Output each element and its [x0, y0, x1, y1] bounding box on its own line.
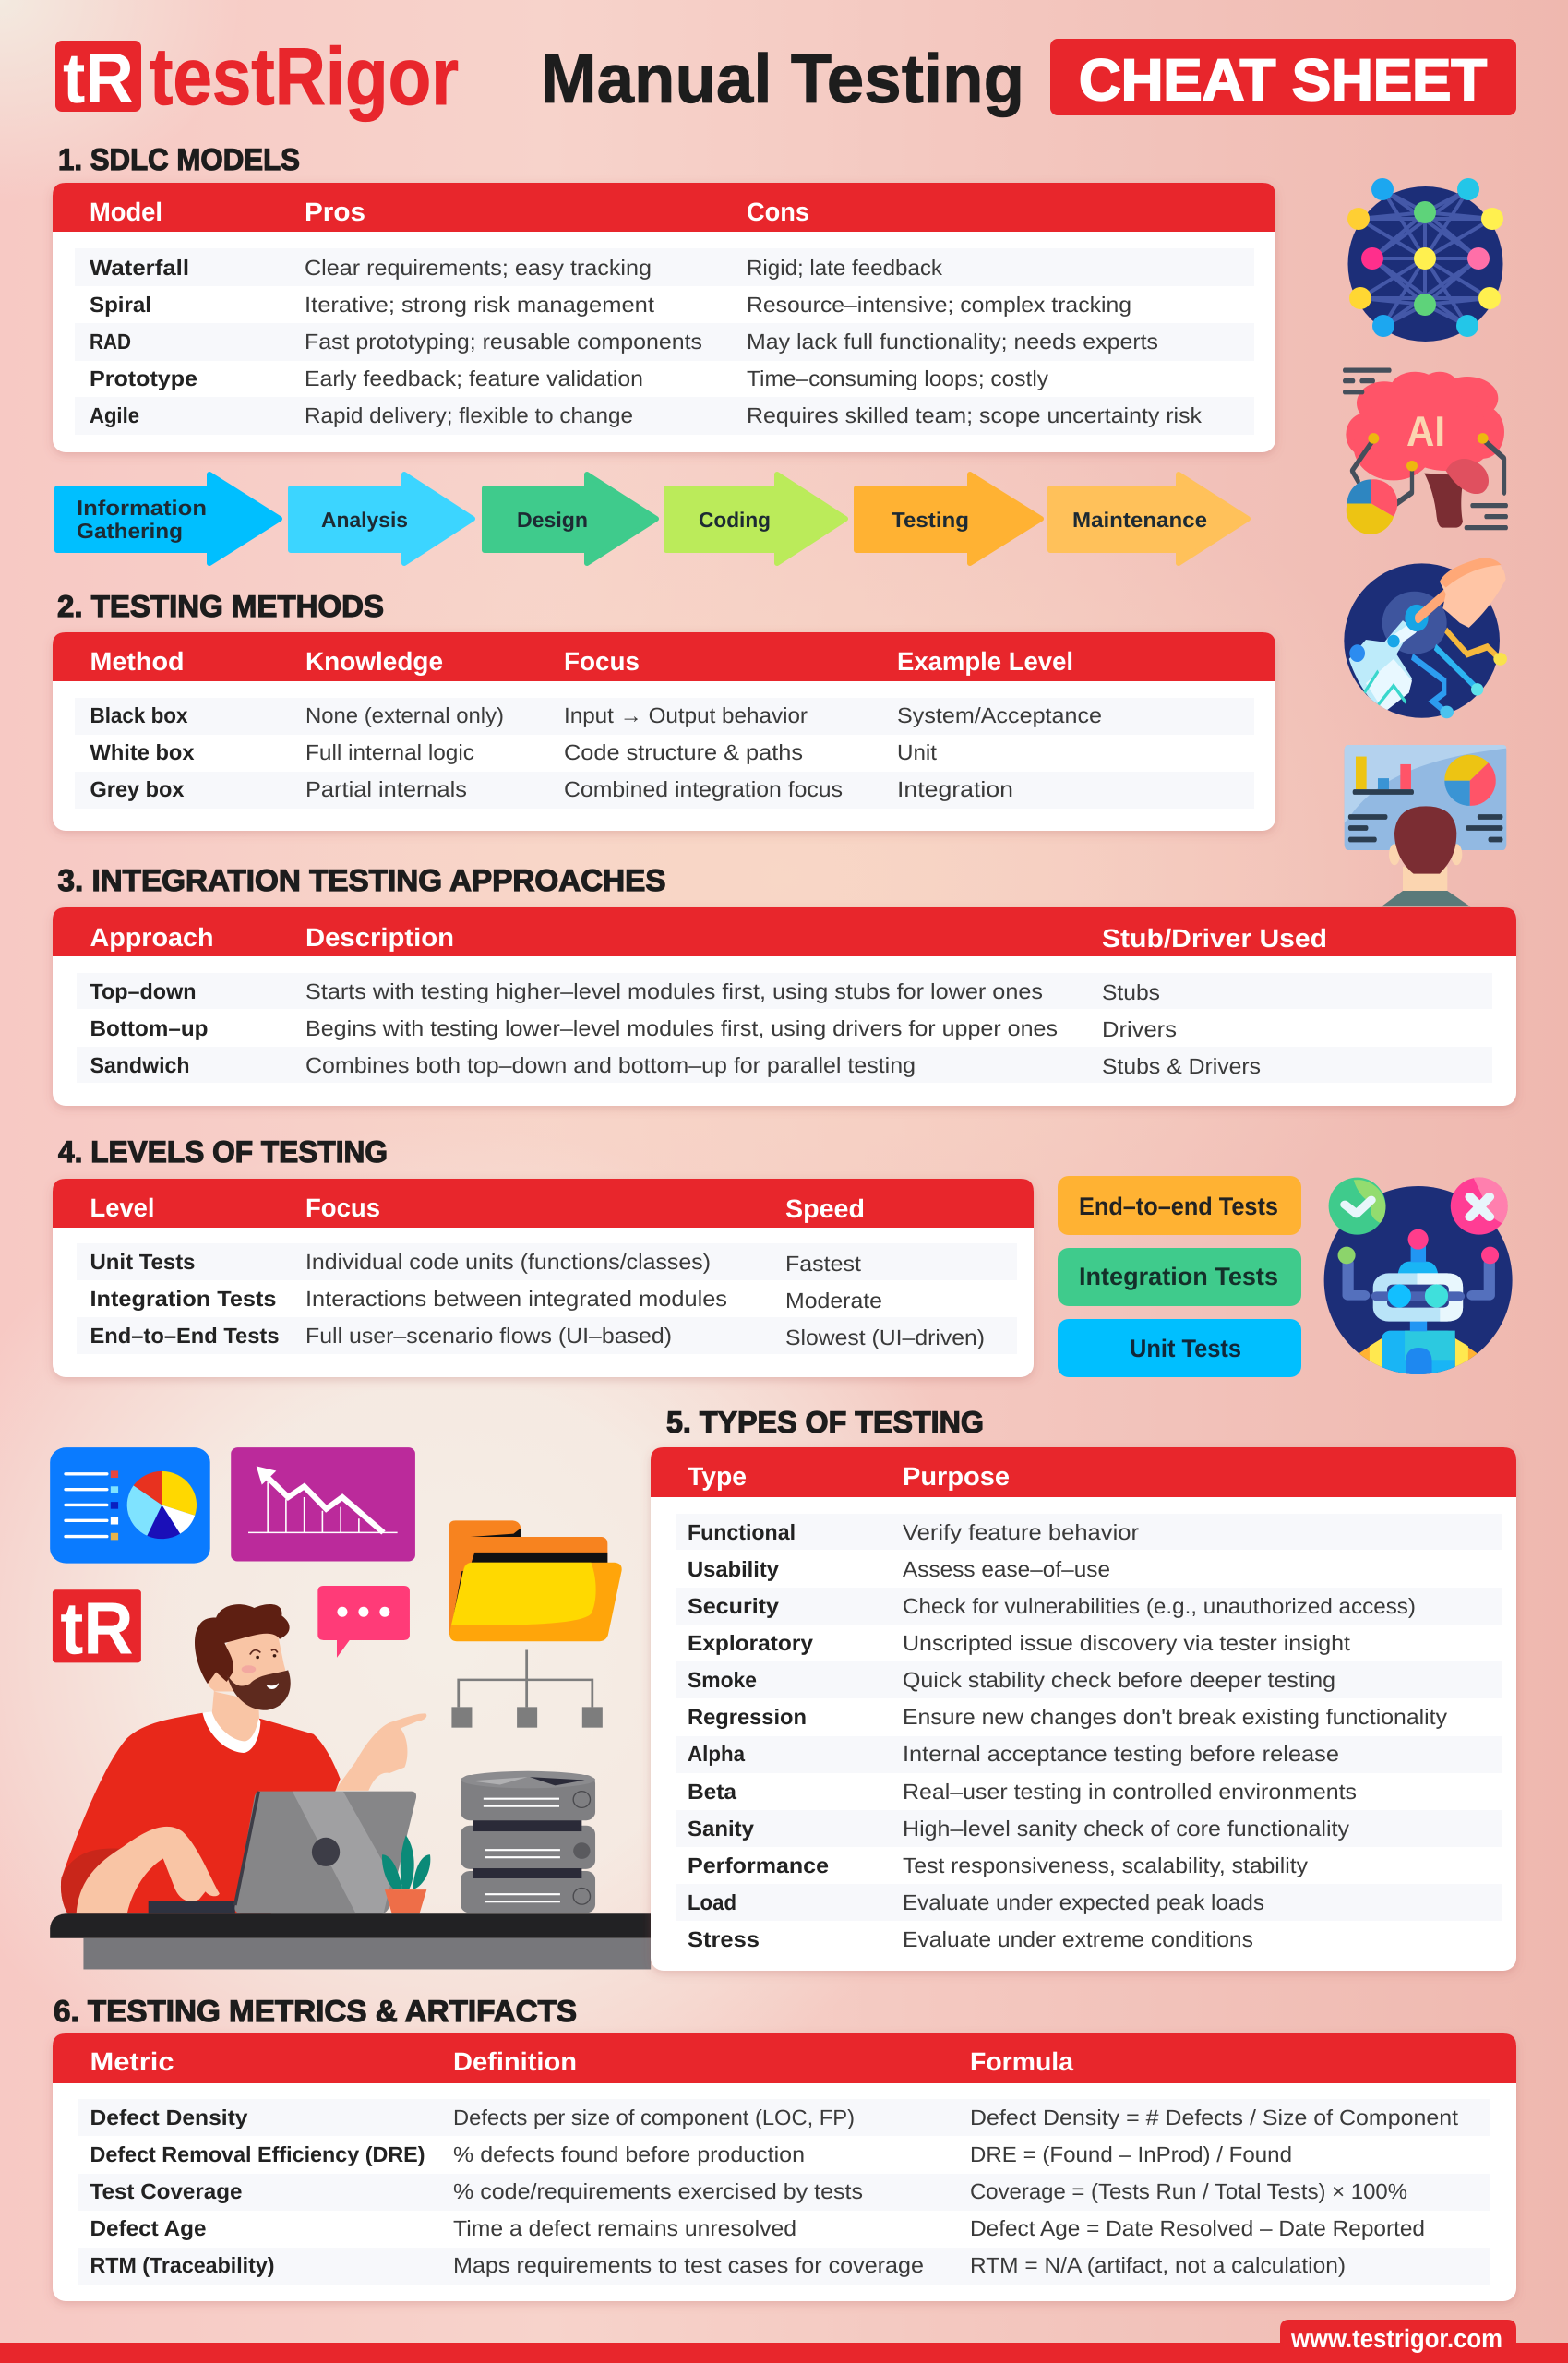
row: Top-down: Top–down — [90, 979, 196, 1003]
panel: testing methods table — [53, 632, 1275, 831]
logo: testRigor: tR — [63, 39, 134, 118]
row: Grey box: Integration — [897, 777, 1013, 801]
row: Grey box: Partial internals — [305, 777, 467, 801]
row: Defect Density: Defects per size of component (LOC, FP) — [453, 2105, 855, 2129]
laptop — [149, 1792, 416, 1913]
header row: Speed — [785, 1194, 865, 1223]
row: White box: White box — [90, 740, 194, 764]
panel: types of testing table — [651, 1447, 1516, 1971]
row: Beta: Beta — [688, 1780, 737, 1804]
row: Black box: System/Acceptance — [897, 703, 1102, 727]
heading: 3. Integration Testing Approaches: 3. INTEGRATION TESTING APPROACHES — [57, 863, 666, 897]
header row — [53, 183, 1275, 232]
heading: 1. SDLC Models: 1. SDLC MODELS — [58, 142, 300, 176]
row: Waterfall — [75, 248, 1254, 286]
header row: Approach — [90, 923, 214, 952]
row: RAD — [75, 323, 1254, 361]
row: Defect Age: Defect Age = Date Resolved – Date Reported — [970, 2216, 1425, 2240]
logo: testRigor — [55, 30, 459, 122]
row: Prototype: Early feedback; feature validation — [305, 366, 643, 390]
row: Beta — [688, 1780, 1357, 1804]
row: Sanity — [676, 1810, 1502, 1847]
header row: Method — [90, 647, 185, 676]
icon: folder — [449, 1520, 622, 1641]
row: White box: Code structure & paths — [564, 740, 803, 764]
test pyramid pills — [1058, 1176, 1301, 1377]
row: Exploratory: Unscripted issue discovery via tester insight — [903, 1631, 1350, 1655]
row: Smoke: Quick stability check before deeper testing — [903, 1668, 1335, 1692]
row: Integration Tests: Interactions between integrated modules — [305, 1287, 727, 1311]
arrow: Coding — [666, 474, 845, 563]
row: Test Coverage — [78, 2174, 1490, 2211]
illustration: tester at laptop with data icons — [50, 1447, 651, 1969]
header row — [53, 632, 1275, 681]
icon: neural network — [1347, 178, 1503, 342]
row: Test Coverage: Coverage = (Tests Run / Total Tests) × 100% — [970, 2179, 1407, 2203]
heading: 4. Levels of Testing: 4. LEVELS OF TESTING — [58, 1134, 388, 1169]
row: Unit Tests: Individual code units (functions/classes) — [305, 1250, 711, 1274]
row: Defect Age: Time a defect remains unresolved — [453, 2216, 796, 2240]
row: Regression: Ensure new changes don't break existing functionality — [903, 1705, 1447, 1729]
row: DRE — [90, 2142, 1292, 2166]
footer bar with website tab — [0, 2320, 1568, 2363]
header row: Metric — [90, 2047, 174, 2076]
row: Usability: Assess ease–of–use — [903, 1557, 1110, 1581]
row: Functional — [676, 1514, 1502, 1550]
row: Security — [676, 1588, 1502, 1625]
row: DRE: Defect Removal Efficiency (DRE) — [90, 2142, 425, 2166]
icon: declining line chart — [231, 1447, 415, 1562]
logo: testRigor: testRigor — [150, 30, 459, 122]
row: Smoke — [676, 1661, 1502, 1698]
header row: Example Level — [897, 647, 1073, 676]
arrow: Maintenance: Maintenance — [1072, 508, 1207, 532]
row: Spiral — [90, 293, 1131, 317]
row: Waterfall: Rigid; late feedback — [747, 256, 942, 280]
row: Defect Density: Defect Density — [90, 2105, 247, 2129]
row: Defect Age: Defect Age — [90, 2216, 207, 2240]
row: Prototype: Time–consuming loops; costly — [747, 366, 1048, 390]
header row: Model — [90, 198, 162, 226]
footer bar with website tab: www.testrigor.com — [1290, 2324, 1502, 2353]
row: Load — [676, 1884, 1502, 1921]
row: Performance: Performance — [688, 1853, 829, 1877]
row: Sanity: Sanity — [688, 1817, 754, 1841]
row: Functional: Functional — [688, 1520, 796, 1544]
heading: 6. Testing Metrics and Artifacts: 6. TESTING METRICS & ARTIFACTS — [54, 1994, 577, 2028]
row: White box: Full internal logic — [305, 740, 474, 764]
row: Stress: Evaluate under extreme conditions — [903, 1927, 1253, 1951]
row: Alpha: Internal acceptance testing before release — [903, 1742, 1339, 1766]
arrow: Coding: Coding — [699, 508, 771, 532]
desk — [50, 1913, 651, 1969]
row: DRE: % defects found before production — [453, 2142, 805, 2166]
header row: Level — [90, 1193, 155, 1222]
row: Defect Density — [78, 2099, 1490, 2136]
row: Usability — [688, 1557, 1110, 1581]
row: Sanity: High–level sanity check of core functionality — [903, 1817, 1349, 1841]
row: Black box: Black box — [90, 703, 188, 727]
row: Exploratory — [688, 1631, 1350, 1655]
title: Manual Testing: Manual Testing — [541, 40, 1024, 117]
header row: Stub/Driver Used — [1102, 924, 1327, 953]
row: End-to-End Tests: Full user–scenario flows (UI–based) — [305, 1324, 672, 1348]
header row: Pros — [305, 198, 365, 226]
arrow: Analysis: Analysis — [321, 508, 408, 532]
row: RTM: RTM (Traceability) — [90, 2253, 275, 2277]
row: Agile — [75, 397, 1254, 435]
arrow: Testing — [856, 474, 1041, 563]
panel: metrics table — [53, 2033, 1516, 2301]
SDLC process arrows — [57, 474, 1248, 563]
row: Usability: Usability — [688, 1557, 779, 1581]
row: Regression — [688, 1705, 1447, 1729]
row: Load: Load — [688, 1890, 736, 1914]
row: Waterfall: Waterfall — [90, 256, 189, 280]
row: Prototype: Prototype — [90, 366, 197, 390]
arrow: Testing: Testing — [892, 508, 969, 532]
row: Waterfall: Clear requirements; easy tracking — [305, 256, 652, 280]
panel: levels of testing table — [53, 1179, 1034, 1377]
row: Stress: Stress — [688, 1927, 760, 1951]
icon: database server — [461, 1771, 595, 1913]
row: End-to-End Tests: End–to–End Tests — [90, 1324, 279, 1348]
icon: AI brain: AI — [1406, 407, 1445, 455]
row: Agile: Requires skilled team; scope uncertainty risk — [747, 403, 1202, 427]
figure: man pointing — [61, 1604, 426, 1913]
icon: hierarchy diagram — [451, 1649, 603, 1728]
arrow: Maintenance — [1050, 474, 1248, 563]
pill: Integration Tests — [1058, 1248, 1301, 1306]
row: Defect Density: Defect Density = # Defects / Size of Component — [970, 2105, 1458, 2129]
row: Top-down: Stubs — [1102, 980, 1160, 1004]
row: Performance: Test responsiveness, scalability, stability — [903, 1853, 1308, 1877]
row: RAD: Fast prototyping; reusable components — [305, 330, 702, 354]
row: Integration Tests: Integration Tests — [90, 1287, 277, 1311]
arrow: Design — [485, 474, 656, 563]
row: Smoke: Smoke — [688, 1668, 757, 1692]
row: Performance — [688, 1853, 1308, 1877]
header row — [53, 907, 1516, 956]
row: Alpha — [676, 1736, 1502, 1773]
title badge: Cheat Sheet: CHEAT SHEET — [1079, 48, 1487, 113]
row: Defect Age — [90, 2216, 1425, 2240]
header row: Focus — [564, 647, 640, 676]
icon: AI brain — [1345, 370, 1506, 534]
header row: Purpose — [903, 1462, 1010, 1491]
row: Integration Tests: Moderate — [785, 1289, 882, 1313]
plant — [382, 1835, 430, 1913]
logo mark: tR: tR — [60, 1587, 134, 1670]
row: Integration Tests — [90, 1287, 882, 1313]
row: White box: Unit — [897, 740, 937, 764]
row: Sandwich — [77, 1047, 1492, 1083]
panel: SDLC models table — [53, 183, 1275, 452]
row: Agile: Rapid delivery; flexible to change — [305, 403, 633, 427]
row: Functional: Verify feature behavior — [903, 1520, 1139, 1544]
row: Test Coverage: Test Coverage — [90, 2179, 242, 2203]
pill: End-to-end Tests — [1058, 1176, 1301, 1235]
row: Alpha: Alpha — [688, 1742, 746, 1766]
row: Unit Tests: Fastest — [785, 1252, 861, 1276]
row: RAD: RAD — [90, 330, 131, 354]
header row: Description — [305, 923, 454, 952]
row: Spiral: Spiral — [90, 293, 151, 317]
header row: Focus — [305, 1193, 380, 1222]
arrow: Information Gathering: Gathering — [77, 519, 183, 543]
row: Unit Tests: Unit Tests — [90, 1250, 196, 1274]
icon: touch interface — [1344, 558, 1507, 718]
row: Exploratory: Exploratory — [688, 1631, 813, 1655]
row: Security: Check for vulnerabilities (e.g., unauthorized access) — [903, 1594, 1416, 1618]
row: Spiral: Iterative; strong risk management — [305, 293, 654, 317]
arrow: Analysis — [291, 474, 473, 563]
row: Regression: Regression — [688, 1705, 807, 1729]
row: End-to-End Tests: Slowest (UI–driven) — [785, 1325, 985, 1349]
row: Grey box: Grey box — [90, 777, 185, 801]
row: Black box: Input → Output behavior — [564, 703, 808, 727]
header row — [53, 1179, 1034, 1228]
row: Prototype — [90, 366, 1048, 390]
header row — [53, 2033, 1516, 2083]
row: Black box: None (external only) — [305, 703, 504, 727]
row: Agile: Agile — [90, 403, 139, 427]
header row: Cons — [747, 198, 809, 226]
header row: Formula — [970, 2047, 1073, 2076]
header row: Definition — [453, 2047, 577, 2076]
header row: Knowledge — [305, 647, 443, 676]
row: White box — [90, 740, 937, 764]
arrow: Design: Design — [517, 508, 588, 532]
row: Spiral: Resource–intensive; complex tracking — [747, 293, 1131, 317]
row: End-to-End Tests — [77, 1317, 1017, 1354]
arrow: Information Gathering — [57, 474, 280, 563]
row: Security: Security — [688, 1594, 779, 1618]
row: Grey box — [75, 772, 1254, 809]
pill: Integration Tests: Integration Tests — [1079, 1263, 1278, 1290]
heading: 5. Types of Testing: 5. TYPES OF TESTING — [666, 1405, 984, 1439]
row: Bottom-up: Bottom–up — [90, 1016, 209, 1040]
row: Bottom-up: Begins with testing lower–level modules first, using drivers for upper ones — [305, 1016, 1058, 1040]
row: Test Coverage: % code/requirements exercised by tests — [453, 2179, 863, 2203]
header row: Type — [688, 1462, 747, 1491]
row: Beta: Real–user testing in controlled environments — [903, 1780, 1357, 1804]
heading: 2. Testing Methods: 2. TESTING METHODS — [57, 589, 384, 623]
row: Top-down: Starts with testing higher–level modules first, using stubs for lower ones — [305, 979, 1043, 1003]
row: Sandwich: Sandwich — [90, 1053, 190, 1077]
pill: End-to-end Tests: End–to–end Tests — [1079, 1193, 1278, 1220]
row: Black box — [75, 698, 1254, 735]
icon: report card with pie chart — [50, 1447, 210, 1564]
pill: Unit Tests — [1058, 1319, 1301, 1377]
row: Load: Evaluate under expected peak loads — [903, 1890, 1264, 1914]
icon: speech bubble — [317, 1586, 410, 1658]
row: DRE: DRE = (Found – InProd) / Found — [970, 2142, 1292, 2166]
row: RTM: Maps requirements to test cases for coverage — [453, 2253, 924, 2277]
row: RTM: RTM = N/A (artifact, not a calculation) — [970, 2253, 1346, 2277]
row: Bottom-up — [90, 1016, 1177, 1041]
row: Bottom-up: Drivers — [1102, 1017, 1177, 1041]
row: Top-down — [77, 973, 1492, 1009]
header row — [651, 1447, 1516, 1497]
icon: analyst at dashboard — [1345, 745, 1506, 906]
row: RTM — [78, 2248, 1490, 2285]
row: Unit Tests — [77, 1243, 1017, 1280]
row: RAD: May lack full functionality; needs experts — [747, 330, 1158, 354]
row: Grey box: Combined integration focus — [564, 777, 843, 801]
arrow: Information Gathering: Information — [77, 496, 207, 520]
row: Sandwich: Stubs & Drivers — [1102, 1054, 1261, 1078]
panel: integration testing table — [53, 907, 1516, 1106]
icon: test robot — [1324, 1177, 1513, 1380]
row: Sandwich: Combines both top–down and bottom–up for parallel testing — [305, 1053, 916, 1077]
pill: Unit Tests: Unit Tests — [1130, 1335, 1241, 1362]
row: Stress — [688, 1927, 1253, 1951]
